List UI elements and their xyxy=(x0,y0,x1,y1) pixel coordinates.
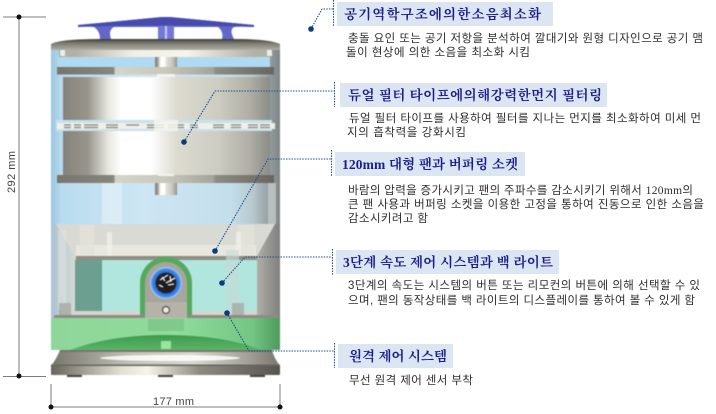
callout 1: noise minimisation xyxy=(308,0,703,59)
top blue wing cap xyxy=(78,17,254,40)
lower stub xyxy=(155,183,177,195)
dimension: height 292 mm: 292 mm xyxy=(6,151,18,193)
icon: fan xyxy=(150,267,182,299)
heading 2 xyxy=(340,83,607,107)
body text 4: 3단계의 속도는 시스템의 버튼 또는 리모컨의 버튼에 의해 선택할 수 있 xyxy=(348,279,700,292)
control module with fan xyxy=(140,257,192,318)
green base section xyxy=(51,318,280,350)
metal base xyxy=(51,350,280,377)
lower ring xyxy=(57,174,274,183)
body text 2: 듀얼 필터 타이프를 사용하여 필터를 지나는 먼지를 최소화하여 미세 먼 xyxy=(349,111,701,125)
body text 1: 충돌 요인 또는 공기 저항을 분석하여 깔대기와 원형 디자인으로 공기 맴 xyxy=(348,31,703,45)
dimension: width 177 mm: 177 mm xyxy=(153,396,194,408)
body text 1 xyxy=(346,31,703,59)
slotted middle ring xyxy=(56,120,275,131)
leader line 1 xyxy=(308,0,334,32)
heading 5 xyxy=(338,344,453,368)
callout 2: dual filter xyxy=(181,82,701,145)
body text 5: 무선 원격 제어 센서 부착 xyxy=(349,373,473,387)
heading 4 xyxy=(336,250,559,274)
heading 2: 듀얼 필터 타이프에의해강력한먼지 필터링 xyxy=(348,87,602,103)
lower plate xyxy=(54,303,278,318)
heading 5: 원격 제어 시스템 xyxy=(349,348,447,364)
callout 4: speed control and backlight xyxy=(219,249,700,307)
blue inner space xyxy=(58,57,270,67)
upper ring xyxy=(57,67,274,77)
heading 4: 3단계 속도 제어 시스템과 백 라이트 xyxy=(343,254,553,270)
dimension: width 177 mm xyxy=(48,384,282,410)
teal display window xyxy=(75,250,257,311)
body text 2 xyxy=(347,111,701,139)
leader line 3 xyxy=(212,150,332,254)
under-lid bracket band xyxy=(59,50,272,59)
icon: screw xyxy=(162,306,170,314)
heading 1 xyxy=(337,2,553,26)
filter two xyxy=(63,131,270,176)
heading 3 xyxy=(335,152,525,176)
body text 3: 바람의 압력을 증가시키고 팬의 주파수를 감소시키기 위해서 120mm의 xyxy=(348,184,693,197)
body glass cylinder xyxy=(51,46,280,350)
body text 2: 지의 흡착력을 강화시킴 xyxy=(347,125,466,139)
body text 4 xyxy=(348,279,700,307)
body text 3: 감소시키려고 함 xyxy=(348,212,428,225)
callout 3: 120mm fan xyxy=(212,150,704,254)
body text 3: 큰 팬 사용과 버퍼링 소켓을 이용한 고정을 통하여 진동으로 인한 소음을 xyxy=(348,197,704,211)
leader line 2 xyxy=(181,82,334,145)
body text 1: 돌이 현상에 의한 소음을 최소화 시킴 xyxy=(346,46,530,59)
heading 1: 공기역학구조에의한소음최소화 xyxy=(344,6,542,22)
leader line 4 xyxy=(219,249,332,286)
callout 5: remote control xyxy=(224,310,473,387)
body text 4: 으며, 팬의 동작상태를 백 라이트의 디스플레이를 통하여 볼 수 있게 함 xyxy=(348,293,695,307)
funnel housing xyxy=(51,224,280,318)
product illustration: cylinder unit xyxy=(51,17,280,377)
heading 3: 120mm 대형 팬과 버퍼링 소켓 xyxy=(342,156,518,172)
dimension: height 292 mm xyxy=(3,14,46,378)
leader line 5 xyxy=(224,310,334,368)
filter one xyxy=(63,77,270,121)
lower glass strips xyxy=(102,183,276,224)
body text 3 xyxy=(348,184,704,225)
top stub xyxy=(155,57,177,68)
lid xyxy=(51,39,280,50)
